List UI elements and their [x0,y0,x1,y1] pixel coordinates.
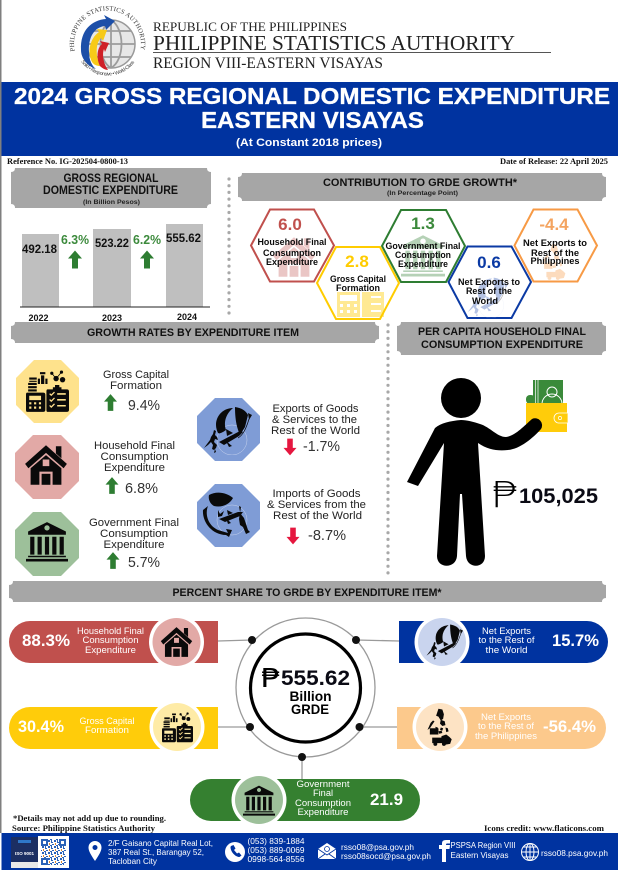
item: imports of goods and services: -8.7% [308,527,346,544]
item: government final consumption: Consumption [100,528,168,540]
pill: government final consumption share: Expenditure [298,807,348,818]
pill: gross capital formation share: Gross Capital [80,716,134,727]
hexagon: net exports to rest of the world [448,246,531,318]
hexagon: net exports to rest of the philippines: Philippines [530,256,580,267]
region subtitle: EASTERN VISAYAS [201,107,424,133]
per capita value: 105,025 [519,485,598,508]
hexagon: government: Government Final [386,241,460,252]
pill: net exports to the rest of the world share: the World [486,645,528,656]
pill: government final consumption share [190,772,420,828]
item: government final consumption: Government Final [89,517,179,529]
center GRDE circle: ₱ [261,664,281,694]
ISO badge [11,837,38,868]
pill: net exports to the rest of the philippines share: -56.4% [543,717,596,736]
header: agency name: PHILIPPINE STATISTICS AUTHORITY [153,31,515,55]
item: government final consumption: 5.7% [128,554,160,571]
pill: government final consumption share: Final [313,788,333,799]
title band [2,82,618,156]
bar chart: 492.18 [22,244,58,256]
price basis note: (At Constant 2018 prices) [236,137,382,149]
icon: phone [225,842,245,862]
pill: net exports to the rest of the philippines share [397,700,606,754]
center GRDE circle: GRDE [291,701,329,717]
hexagon: household: Household Final [258,237,326,248]
release date: Date of Release: 22 April 2025 [500,157,608,166]
item: gross capital formation: Gross Capital [103,369,169,381]
icon: web globe [522,844,538,860]
address: 387 Real St., Barangay 52, [108,847,204,857]
center GRDE circle: 555.62 [281,667,350,690]
panel: gross regional domestic expenditure [11,168,211,323]
item: exports of goods and services: & Services to the [272,414,357,426]
hexagon: net exports to rest of the world: World [472,296,498,307]
header: agency name: REPUBLIC OF THE PHILIPPINES [153,19,347,34]
hexagon: net exports to rest of the world: Rest of the [466,286,512,297]
icon: facebook [439,840,450,862]
panel: contribution to GRDE growth [238,173,606,319]
email addresses [341,842,431,861]
facebook page: PSPSA Region VIII [450,840,516,850]
pill: household share [9,614,218,670]
pill: net exports to the rest of the world share: Net Exports [482,626,531,637]
pill: household share: 88.3% [22,631,70,650]
per capita value: ₱ [490,475,519,516]
item: household final consumption [15,435,175,499]
hexagon: net exports to rest of the philippines: Net Exports to [523,238,587,249]
bar chart: 2024 [177,312,197,322]
header: PSA logo: PHILIPPINE STATISTICS AUTHORITY [70,6,146,52]
item: exports of goods and services: -1.7% [303,438,340,455]
pill: gross capital formation share: Formation [85,725,129,736]
item: household final consumption: Expenditure [104,462,165,474]
item: household final consumption: Household Final [94,440,175,452]
per capita value [490,475,598,516]
icons credit: Icons credit: www.flaticons.com [484,824,604,833]
pill: net exports to the rest of the philippines share: to the Rest of [478,721,534,732]
hexagon: net exports to rest of the philippines: Rest of the [531,248,579,259]
hexagon: gross capital formation: Formation [336,283,380,294]
pill: net exports to the rest of the world share [399,614,608,670]
center GRDE circle: Billion [290,688,332,704]
panel heading: PERCENT SHARE TO GRDE BY EXPENDITURE ITEM* [172,587,442,599]
item: gross capital formation [16,360,169,423]
panel heading [238,173,606,201]
item: household final consumption: 6.8% [125,480,158,497]
icon: email [318,843,336,859]
header: PSA logo [70,6,146,76]
footnote: rounding note: *Details may not add up due to rounding. [13,814,166,823]
panel heading: GROWTH RATES BY EXPENDITURE ITEM [87,327,299,339]
pill: government final consumption share: Consumption [295,798,351,809]
bar chart: 2023 [102,313,122,323]
bar chart: 555.62 [166,233,201,245]
item: gross capital formation: 9.4% [128,397,160,414]
phone numbers: (053) 889-0069 [248,845,305,855]
address: Tacloban City [108,856,158,866]
pill: household share: Consumption [82,635,138,646]
panel heading: (In Percentage Point) [387,190,458,197]
panel heading: CONSUMPTION EXPENDITURE [421,339,583,351]
address [108,838,213,866]
hexagon: net exports to rest of the philippines: -4.4 [539,215,569,234]
panel: per capita household final consumption expenditure [397,322,606,566]
icon: location pin [88,841,102,861]
panel heading: GROSS REGIONAL [64,173,158,185]
hexagon: household: Consumption [263,248,321,259]
hexagon: household [251,210,334,282]
item: imports of goods and services [197,484,366,547]
center GRDE circle [236,618,375,761]
icon: person silhouette [407,378,542,566]
item: government final consumption [15,512,179,576]
ISO badge: ISO 9001 [15,851,35,856]
panel: percent share to GRDE by expenditure item [9,581,608,828]
email addresses: rsso08@psa.gov.ph [341,842,414,852]
item: exports of goods and services: Rest of the World [271,425,360,437]
bar chart: 6.2% [133,233,161,247]
pill: government final consumption share: Government [296,779,350,790]
panel heading: CONTRIBUTION TO GRDE GROWTH* [323,177,518,189]
pill: gross capital formation share: 30.4% [18,717,64,736]
panel heading [397,322,606,355]
hexagon: household: 6.0 [278,215,302,234]
header: agency name: REGION VIII-EASTERN VISAYAS [153,55,383,72]
hexagon: gross capital formation: Gross Capital [330,274,386,285]
phone numbers [248,836,305,864]
header: agency name [153,19,551,72]
panel heading [9,581,606,602]
reference number: Reference No. IG-202504-0800-13 [7,157,128,166]
item: imports of goods and services: Imports of Goods [272,488,361,500]
item: imports of goods and services: & Services from the [267,499,366,511]
item: household final consumption: Consumption [100,451,168,463]
main title: 2024 GROSS REGIONAL DOMESTIC EXPENDITURE [14,83,610,109]
bar chart: 6.3% [61,233,89,247]
website: rsso08.psa.gov.ph [541,848,608,858]
facebook page [450,840,516,860]
hexagon: government: 1.3 [411,214,435,233]
hexagon: gross capital formation: 2.8 [345,252,369,271]
bar chart: 2022 [28,313,49,323]
item: imports of goods and services: Rest of the World [273,510,362,522]
hexagon: government: Expenditure [398,259,448,270]
item: gross capital formation: Formation [110,380,162,392]
icon: wallet with money [526,380,568,432]
bar chart [20,224,210,323]
bar chart: 523.22 [95,238,129,250]
panel heading [11,168,211,208]
footer band [2,833,618,870]
hexagon: government: Consumption [395,250,451,261]
phone numbers: (053) 839-1884 [248,836,305,846]
phone numbers: 0998-564-8556 [248,854,305,864]
item: government final consumption: Expenditure [104,539,164,551]
pill: government final consumption share: 21.9 [370,790,403,809]
facebook page: Eastern Visayas [450,850,508,860]
pill: household share: Household Final [77,626,144,637]
panel heading [11,322,379,343]
QR code [38,836,69,868]
hexagon: government [382,210,465,282]
connector lines [218,640,399,780]
panel: growth rates by expenditure item [11,322,379,576]
address: 2/F Gaisano Capital Real Lot, [108,838,213,848]
hexagon: household: Expenditure [266,257,318,268]
panel heading: (In Billion Pesos) [83,199,140,206]
pill: gross capital formation share [9,700,218,754]
hexagon: net exports to rest of the philippines [514,210,597,282]
pill: household share: Expenditure [85,645,136,656]
panel heading: PER CAPITA HOUSEHOLD FINAL [418,326,586,338]
pill: net exports to the rest of the world share: to the Rest of [478,635,535,646]
hexagon: net exports to rest of the world: Net Exports to [458,277,520,288]
pill: net exports to the rest of the philippines share: the Philippines [475,731,537,742]
pill: net exports to the rest of the philippines share: Net Exports [481,712,531,723]
hexagon: gross capital formation [317,247,399,319]
panel heading: DOMESTIC EXPENDITURE [43,185,178,197]
item: exports of goods and services [197,398,360,461]
item: exports of goods and services: Exports of Goods [272,403,359,415]
pill: net exports to the rest of the world share: 15.7% [552,631,599,650]
hexagon: net exports to rest of the world: 0.6 [477,253,501,272]
header: PSA logo: Solid • Responsive • World-Class [82,60,134,76]
email addresses: rsso08socd@psa.gov.ph [341,851,431,861]
footnote: source: Source: Philippine Statistics Authority [12,824,155,833]
